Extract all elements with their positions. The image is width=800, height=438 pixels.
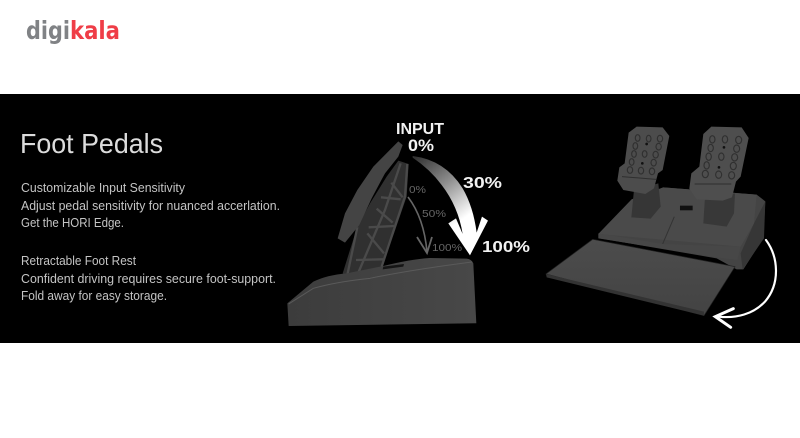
large gradient arrow (413, 156, 488, 255)
unit right side (741, 201, 765, 269)
text block: foot rest: Fold away for easy storage. (21, 289, 167, 303)
small scale labels: 100% (432, 243, 462, 254)
front view pedal illustration (546, 127, 776, 327)
left pedal arm (631, 183, 661, 219)
unit seam (663, 217, 674, 244)
footrest front edge (546, 274, 704, 316)
right pedal plate (689, 127, 749, 201)
logo: digikala: digi (26, 16, 70, 45)
heading: Foot Pedals: Foot Pedals (20, 128, 163, 159)
input labels: 0% (408, 136, 434, 155)
logo: digikala: kala (70, 16, 120, 45)
label 30 percent: 30% (463, 175, 502, 192)
small scale labels (409, 185, 462, 254)
pedal arm (343, 161, 409, 278)
left pedal plate (617, 127, 669, 194)
text block: input sensitivity: Customizable Input Sensitivity (21, 181, 186, 195)
arm ribs (347, 163, 407, 275)
text block: input sensitivity: Adjust pedal sensitivity for nuanced accerlation. (21, 199, 280, 213)
small arrow: 0 to 100 percent (408, 197, 432, 253)
pedal unit body (598, 187, 765, 269)
text block: foot rest (21, 254, 276, 303)
base slot (383, 264, 404, 269)
small scale labels: 50% (422, 209, 446, 220)
input labels: INPUT (396, 121, 445, 138)
logo: digikala (26, 16, 120, 45)
black banner panel (0, 94, 800, 343)
text block: foot rest: Confident driving requires secure foot-support. (21, 272, 276, 286)
text block: input sensitivity (21, 181, 280, 230)
input labels (396, 121, 445, 155)
pedal plate (338, 141, 403, 243)
base top highlight (289, 262, 472, 304)
center port (680, 206, 693, 210)
front lip of unit (598, 233, 741, 260)
footrest plate (546, 239, 735, 316)
pedal base (287, 258, 476, 326)
fold arrow (715, 240, 776, 327)
unit top face (598, 187, 757, 247)
text block: foot rest: Retractable Foot Rest (21, 254, 136, 268)
text block: input sensitivity: Get the HORI Edge. (21, 216, 124, 230)
side view pedal illustration (287, 141, 476, 326)
right pedal arm (703, 193, 735, 227)
label 100 percent: 100% (482, 239, 530, 256)
small scale labels: 0% (409, 185, 426, 196)
